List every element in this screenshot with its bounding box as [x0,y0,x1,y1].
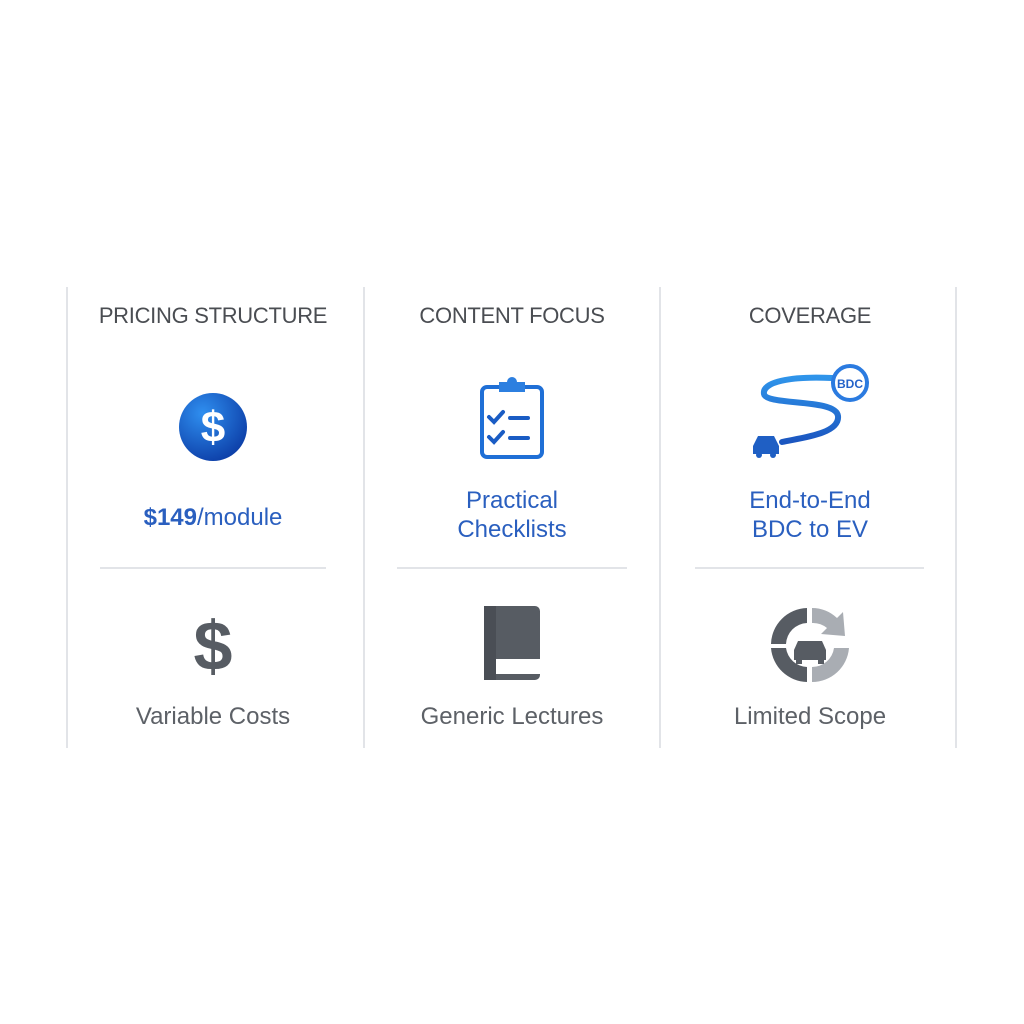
heading: pricing structure: PRICING STRUCTURE [99,303,327,328]
icon: clipboard [480,377,544,459]
text: generic lectures: Generic Lectures [421,703,603,730]
text: practical checklists: Practical [466,487,558,514]
text: practical checklists [457,487,567,543]
panel: pricing [99,303,327,730]
panel: coverage [734,303,886,730]
text: limited scope: Limited Scope [734,703,886,730]
text: variable costs: Variable Costs [136,703,290,730]
text: price: $149/module [144,504,282,531]
icon: book [484,606,540,680]
icon: road with BDC: BDC [837,377,863,391]
heading: content focus: CONTENT FOCUS [419,303,605,328]
text: end-to-end: BDC to EV [752,516,868,543]
icon: dollar coin [179,393,247,461]
icon: dollar coin: $ [201,403,225,452]
heading: coverage: COVERAGE [749,303,871,328]
text: practical checklists: Checklists [457,516,567,543]
text: end-to-end: End-to-End [749,487,871,514]
panel: content focus [419,303,605,730]
icon: gray dollar: $ [194,607,232,685]
text: end-to-end [749,487,871,543]
icon: road with BDC [753,364,869,458]
icon: cycle car [771,608,849,682]
